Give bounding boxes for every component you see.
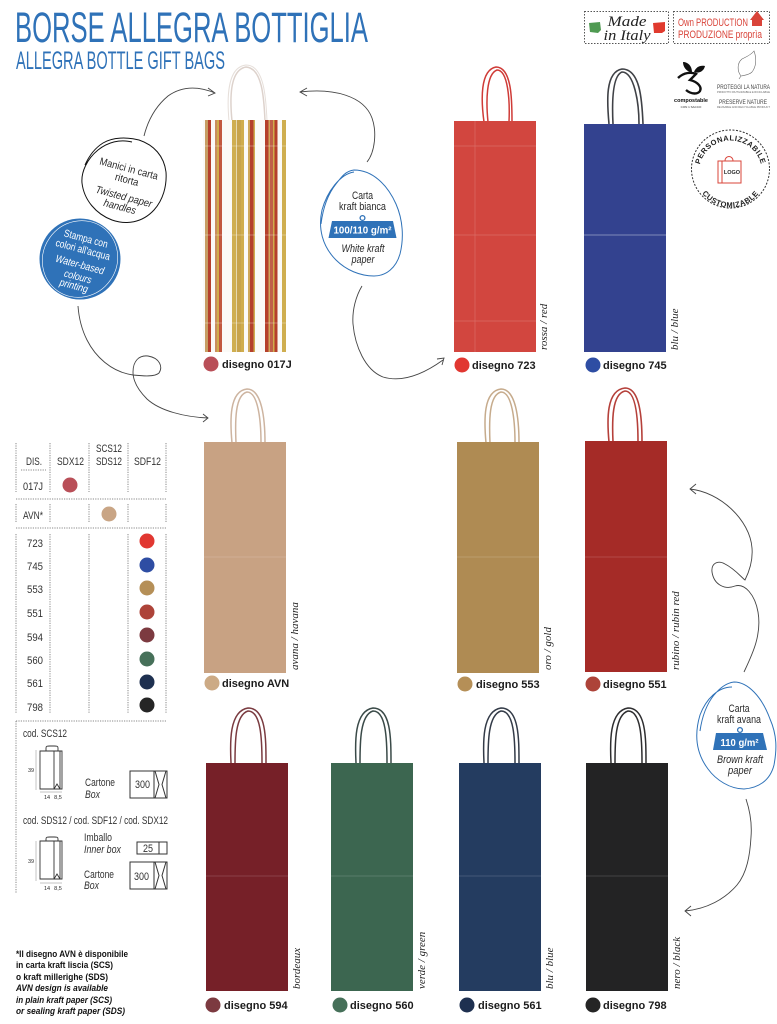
packaging: cod. SCS12: Box (85, 789, 100, 801)
label: disegno 723 (454, 303, 550, 372)
label: disegno 551: disegno 551 (603, 679, 667, 691)
badge: own production (674, 11, 770, 44)
bag: avana AVN (204, 389, 286, 673)
callout: water-based printing: colours (63, 268, 93, 287)
badge: customizable logo stamp: PERSONALIZZABILE (695, 135, 766, 164)
packaging: cod. SCS12: 39 (28, 768, 34, 774)
arrow: white kraft to handle (300, 88, 375, 162)
packaging: cod. SDS12 / SDF12 / SDX12: Cartone (84, 869, 114, 881)
packaging: cod. SCS12: Cartone (85, 777, 115, 789)
bag: verde 560 (331, 708, 413, 991)
packaging: cod. SCS12: 14 (44, 795, 50, 801)
badge: made in Italy: Made (606, 14, 647, 30)
label: disegno 017J: disegno 017J (222, 359, 292, 371)
label: disegno AVN: disegno AVN (222, 678, 289, 690)
packaging: cod. SDS12 / SDF12 / SDX12: 300 (134, 871, 149, 883)
table: availability by code: 594 (27, 632, 43, 644)
bag: striped 017J (203, 65, 286, 352)
label: disegno 553 (458, 627, 554, 692)
arrow: handles to bag (144, 88, 215, 136)
table: availability by code: 017J (23, 481, 43, 493)
footnote: AVN availability: in carta kraft liscia (SCS) (16, 960, 113, 971)
bag: bordeaux 594 (206, 708, 288, 991)
table: availability by code: 553 (27, 584, 43, 596)
badge: made in Italy: in Italy (604, 28, 651, 44)
caption: rubino / rubin red: rubino / rubin red (670, 591, 682, 670)
icon: compostable (674, 62, 708, 109)
callout: brown kraft paper (697, 682, 776, 789)
bag: rubino 551 (585, 388, 667, 672)
callout: twisted paper handles: Manici in carta (98, 156, 159, 183)
label: disegno 560 (332, 931, 428, 1012)
footnote: AVN availability: *Il disegno AVN è disponibile (16, 949, 128, 960)
callout: brown kraft paper: paper (727, 765, 753, 777)
badge: own production: Own PRODUCTION (678, 17, 748, 29)
caption: rossa / red: rossa / red (538, 303, 550, 350)
packaging: cod. SDS12 / SDF12 / SDX12 (23, 815, 168, 892)
arrow: printing to avana bag (78, 306, 208, 422)
table: availability by code: SDS12 (96, 456, 122, 468)
bag: blue 745 (584, 69, 666, 352)
icon: compostable: compostable (674, 98, 708, 104)
callout: white kraft paper: 100/110 g/m² (334, 226, 392, 236)
callout: brown kraft paper: kraft avana (717, 714, 762, 726)
label: disegno 745 (586, 308, 681, 372)
icon: preserve nature (717, 51, 770, 109)
arrow: brown kraft to rubino bag (690, 484, 759, 672)
table: availability by code: 560 (27, 655, 43, 667)
footnote: AVN availability: o kraft millerighe (SDS) (16, 972, 108, 983)
packaging: cod. SCS12: cod. SCS12 (23, 728, 67, 740)
caption: blu / blue: blu / blue (669, 308, 681, 350)
bag: oro 553 (457, 389, 539, 673)
label: disegno 594: disegno 594 (224, 1000, 288, 1012)
footnote: AVN availability: or sealing kraft paper (SDS) (16, 1006, 125, 1017)
packaging: cod. SDS12 / SDF12 / SDX12: Box (84, 880, 99, 892)
label: disegno 017J (204, 356, 292, 372)
callout: brown kraft paper: 110 g/m² (720, 738, 759, 749)
icon: preserve nature: REUSABLE AND RECYCLABLE PRODUCT (717, 105, 770, 109)
icon: preserve nature: PRODOTTO RIUTILIZZABILE E RICICLABILE (717, 90, 770, 94)
label: disegno 561 (460, 947, 556, 1012)
footnote: AVN availability: AVN design is available (15, 983, 109, 994)
callout: brown kraft paper: Brown kraft (717, 754, 764, 766)
label: disegno 745: disegno 745 (603, 360, 667, 372)
packaging: cod. SCS12 (16, 721, 167, 893)
title: BORSE ALLEGRA BOTTIGLIA (15, 4, 368, 52)
label: disegno 798 (586, 936, 683, 1012)
table: availability by code: SCS12 (96, 443, 122, 455)
table: availability by code: SDF12 (134, 456, 161, 468)
bag: nero 798 (586, 708, 668, 991)
label: disegno 551 (586, 591, 682, 692)
caption: oro / gold: oro / gold (542, 627, 554, 670)
callout: white kraft paper (321, 170, 402, 276)
callout: twisted paper handles: handles (102, 197, 138, 217)
packaging: cod. SDS12 / SDF12 / SDX12: 25 (143, 843, 153, 855)
arrow: brown kraft to nero bag (685, 799, 751, 916)
caption: avana / havana: avana / havana (289, 602, 301, 670)
packaging: cod. SDS12 / SDF12 / SDX12: 8,5 (54, 886, 62, 892)
label: disegno 553: disegno 553 (476, 679, 540, 691)
callout: white kraft paper: paper (351, 254, 376, 266)
arrow: white kraft to red bag (353, 286, 444, 379)
table: availability by code: SDX12 (57, 456, 84, 468)
icon: compostable: CON 1 SACCO (681, 105, 702, 109)
callout: water-based printing (27, 206, 133, 312)
table: availability by code (16, 443, 167, 714)
caption: bordeaux: bordeaux (291, 948, 303, 989)
bag: red 723 (454, 67, 536, 352)
label: disegno AVN (204, 602, 301, 690)
callout: twisted paper handles: ritorta (114, 171, 140, 189)
callout: white kraft paper: kraft bianca (339, 201, 387, 213)
callout: twisted paper handles: Twisted paper (94, 184, 154, 211)
footnote: AVN availability (15, 949, 128, 1017)
label: disegno 798: disegno 798 (603, 1000, 667, 1012)
title (15, 4, 368, 75)
callout: brown kraft paper: Carta (728, 703, 750, 715)
label: disegno 560: disegno 560 (350, 1000, 414, 1012)
footnote: AVN availability: in plain kraft paper (SCS) (16, 995, 112, 1006)
bag: blu 561 (459, 708, 541, 991)
callout: water-based printing: colori all'acqua (54, 237, 111, 263)
callout: white kraft paper: White kraft (342, 243, 385, 255)
table: availability by code: DIS. (26, 456, 42, 468)
badge: customizable logo stamp: LOGO (724, 170, 741, 176)
table: availability by code: AVN* (23, 510, 44, 522)
packaging: cod. SCS12: 8,5 (54, 795, 62, 801)
callout: water-based printing: printing (57, 276, 89, 296)
label: disegno 561: disegno 561 (478, 1000, 542, 1012)
table: availability by code: 561 (27, 678, 43, 690)
badge: customizable logo stamp: CUSTOMIZABLE (703, 190, 758, 208)
packaging: cod. SDS12 / SDF12 / SDX12: Inner box (84, 844, 121, 856)
table: availability by code: 723 (27, 538, 43, 550)
table: availability by code: 798 (27, 702, 43, 714)
subtitle: ALLEGRA BOTTLE GIFT BAGS (16, 47, 225, 75)
badge: made in Italy (584, 12, 668, 44)
badge: customizable logo stamp (691, 130, 770, 208)
packaging: cod. SDS12 / SDF12 / SDX12: Imballo (84, 832, 112, 844)
callout: white kraft paper: Carta (352, 190, 374, 202)
table: availability by code: 551 (27, 608, 43, 620)
label: disegno 594 (206, 948, 303, 1012)
packaging: cod. SCS12: 300 (135, 779, 150, 791)
callout: water-based printing: Stampa con (62, 227, 109, 251)
table: availability by code: 745 (27, 561, 43, 573)
caption: blu / blue: blu / blue (544, 947, 556, 989)
caption: nero / black: nero / black (671, 936, 683, 989)
callout: twisted paper handles (82, 138, 166, 223)
packaging: cod. SDS12 / SDF12 / SDX12: cod. SDS12 / cod. SDF12 / cod. SDX12 (23, 815, 168, 827)
label: disegno 723: disegno 723 (472, 360, 536, 372)
caption: verde / green: verde / green (416, 931, 428, 989)
callout: water-based printing: Water-based (54, 253, 106, 278)
packaging: cod. SDS12 / SDF12 / SDX12: 14 (44, 886, 50, 892)
packaging: cod. SDS12 / SDF12 / SDX12: 39 (28, 859, 34, 865)
